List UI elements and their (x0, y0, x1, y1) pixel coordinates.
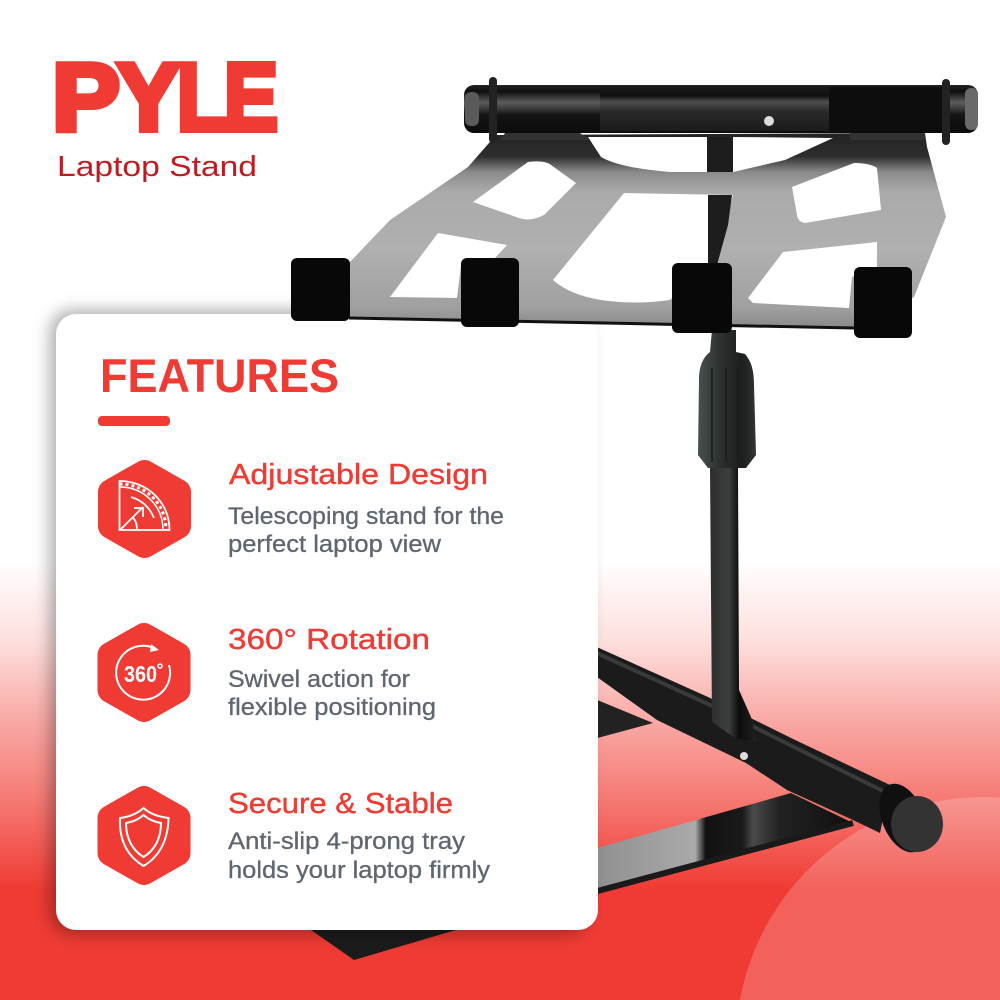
logo: PYLE (52, 44, 278, 151)
feature text: 360 Rotation (228, 666, 436, 721)
icon: adjustable angle (111, 473, 178, 545)
panel: features card (56, 314, 598, 930)
feature text: Adjustable Design: Telescoping stand for the (228, 503, 504, 530)
feature text: 360 Rotation: flexible positioning (228, 694, 436, 721)
feature text: Adjustable Design: perfect laptop view (228, 531, 442, 558)
icon: 360 rotation (110, 636, 178, 709)
stand base (311, 644, 943, 960)
feature text: 360 Rotation: Swivel action for (228, 666, 410, 693)
logo: PYLE: Y (117, 44, 180, 151)
central rib behind tray (707, 137, 733, 265)
stem and collar (698, 330, 757, 742)
feature text: Adjustable Design (228, 503, 504, 558)
logo: PYLE: L (177, 44, 227, 151)
tray lower edge (349, 318, 854, 328)
feature text: Secure & Stable (228, 828, 490, 884)
heading: FEATURES: FEATURES (100, 349, 339, 402)
logo: PYLE: E (224, 44, 278, 151)
tray plate (349, 133, 946, 327)
logo: PYLE: P (52, 44, 120, 151)
feature title: 360 Rotation: 360° Rotation (228, 624, 430, 656)
feature title: Adjustable Design: Adjustable Design (229, 459, 488, 491)
heading underline (98, 416, 170, 426)
feature text: Secure & Stable: holds your laptop firmly (228, 857, 490, 884)
icon: shield (110, 799, 178, 872)
top bar (464, 77, 978, 145)
feature title: Secure & Stable: Secure & Stable (228, 788, 453, 820)
feature text: Secure & Stable: Anti-slip 4-prong tray (228, 828, 465, 855)
icon: 360 rotation: 360 (124, 661, 157, 687)
subtitle: Laptop Stand: Laptop Stand (57, 151, 257, 183)
decorative corner circle (740, 797, 1000, 1000)
card shadow (50, 310, 588, 934)
prongs (291, 258, 350, 321)
laptop stand upper assembly (291, 77, 978, 742)
